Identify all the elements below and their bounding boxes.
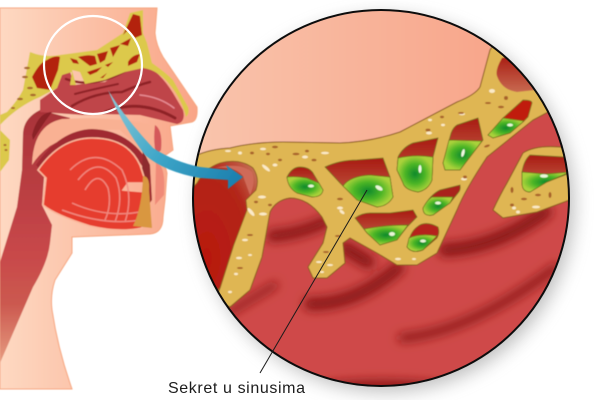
bone pores [4,67,36,151]
pink tissue [199,11,491,154]
sinus 2 [324,157,390,187]
right bone island [493,147,575,218]
jaw bone [133,176,152,228]
nasal cavity folds [66,68,175,118]
bone of skull [0,10,189,125]
left dark chamber [194,160,258,290]
sinus 1 [287,100,570,251]
tongue muscle stripes [62,158,140,222]
bone pores [225,89,540,293]
sinus 8 [407,224,439,251]
sinus chambers in head [32,14,142,90]
mouth arch [36,129,152,208]
sinus: top right [497,55,535,92]
arrow [108,90,243,189]
sinus 5 [502,99,533,131]
tongue [38,138,146,230]
bone spur [0,130,10,172]
throat fold [142,150,150,190]
circle shadow [198,16,574,392]
lens border [193,10,569,386]
skin silhouette [0,8,197,389]
lips [154,125,161,156]
chamber inner glow [215,166,254,195]
sinus 9 [521,154,566,182]
palate band [32,118,155,165]
main bone [190,42,552,307]
head cross-section [0,8,197,389]
sinus 6 [426,184,462,203]
leader line [260,190,367,373]
lower lip [155,162,164,205]
muscle background [218,112,568,385]
label: Sekret u sinusima [168,380,305,397]
magnifier ring [44,16,142,114]
nasal cavity [40,63,184,124]
magnified sinus lens [185,0,575,392]
sinus 4 [448,117,484,150]
sinus 7 [354,209,418,238]
soft palate fold [32,112,52,140]
sinus 3 [396,137,439,173]
muscle folds [230,212,555,392]
throat passage [0,110,70,363]
